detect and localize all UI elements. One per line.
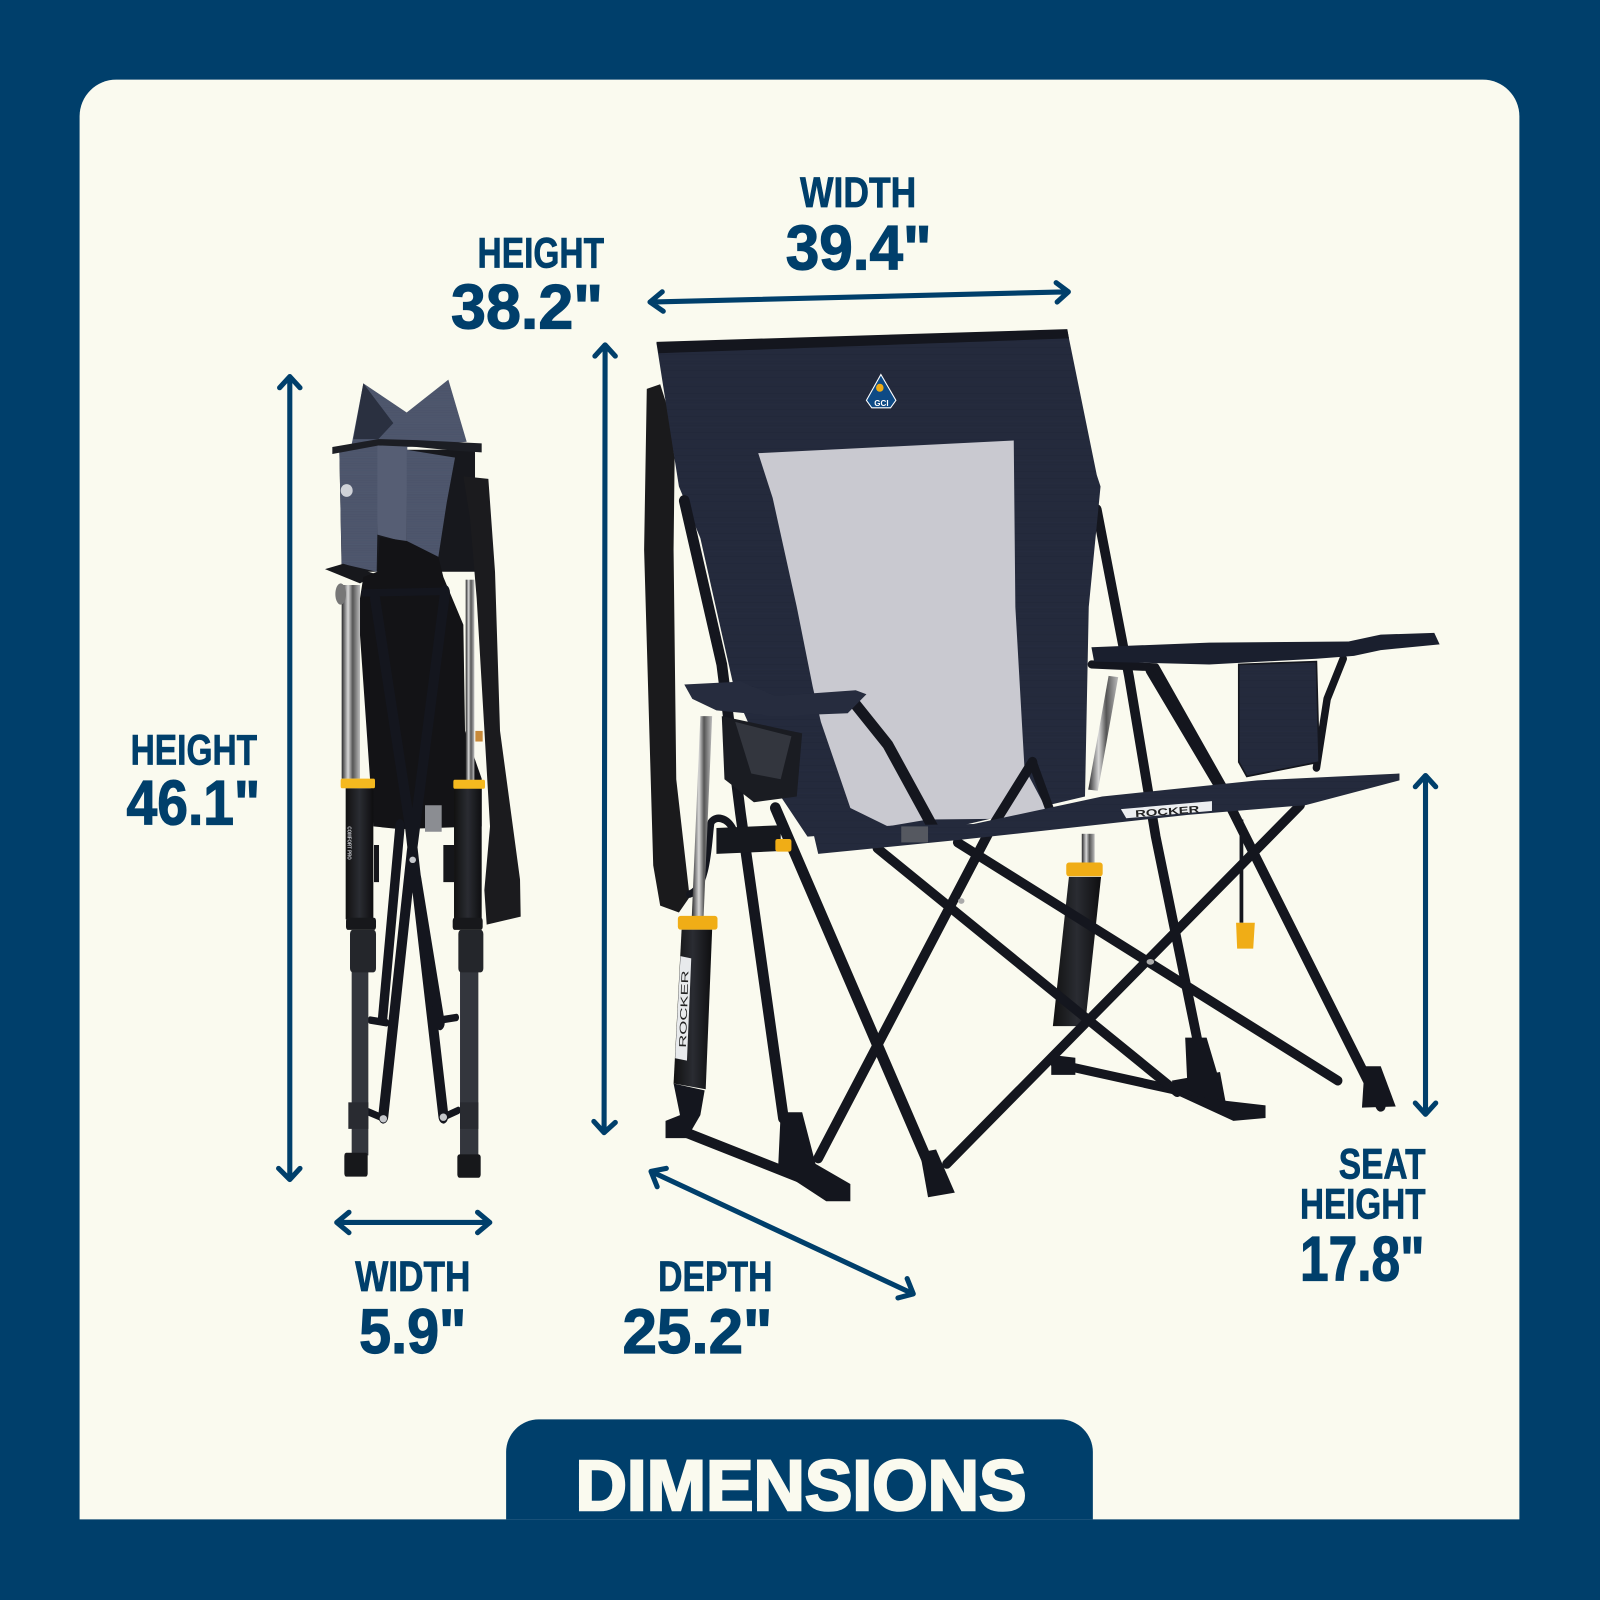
GCI logo: GCI — [874, 398, 889, 408]
lanyard and tab — [1238, 819, 1245, 923]
label: depth: DEPTH — [658, 1253, 772, 1300]
folded chair photo: COMFORT PRO — [345, 826, 352, 860]
rear frame — [1088, 676, 1118, 791]
label: folded width: 5.9" — [359, 1297, 466, 1367]
label: chair width: 39.4" — [786, 213, 932, 283]
arrow: chair height — [594, 345, 615, 1133]
label: seat height: SEAT — [1339, 1141, 1426, 1188]
mesh panel — [758, 441, 1051, 826]
label: folded height — [127, 726, 260, 838]
seat label — [1121, 801, 1212, 819]
label: depth — [622, 1253, 772, 1367]
arrow: folded height — [279, 377, 300, 1180]
label: folded width — [355, 1253, 470, 1367]
label: seat height — [1300, 1141, 1426, 1295]
pivot hardware — [716, 825, 781, 854]
title tab: dimensions — [506, 1419, 1093, 1526]
arrow: top width — [650, 283, 1068, 311]
title tab: dimensions: DIMENSIONS — [576, 1446, 1027, 1526]
label: folded height: HEIGHT — [131, 726, 257, 773]
left arm — [684, 682, 866, 716]
main chair photo — [644, 329, 1440, 1201]
seat — [813, 774, 1399, 854]
seat label: ROCKER — [1135, 803, 1200, 819]
arrow: seat height — [1415, 776, 1436, 1114]
arrow: depth — [651, 1168, 913, 1298]
main chair photo: ROCKER — [677, 970, 691, 1048]
folded chair photo — [325, 380, 521, 1178]
label: chair height: 38.2" — [451, 273, 603, 343]
label: chair width — [786, 169, 932, 283]
label: depth: 25.2" — [622, 1297, 772, 1367]
front rocker rail — [671, 1127, 845, 1195]
GCI logo — [866, 375, 896, 408]
label: chair height: HEIGHT — [478, 229, 604, 276]
feet — [920, 1150, 955, 1197]
label: seat height: 17.8" — [1300, 1225, 1424, 1295]
carry strap — [644, 384, 690, 912]
label: folded width: WIDTH — [355, 1253, 470, 1300]
label: folded height: 46.1" — [127, 768, 260, 838]
label: seat height: HEIGHT — [1300, 1180, 1426, 1227]
right pocket — [1239, 662, 1319, 776]
right arm — [1091, 633, 1440, 664]
left rocker cylinder — [674, 930, 712, 1089]
cup holder — [722, 716, 802, 802]
label: chair width: WIDTH — [800, 169, 916, 216]
arrow: folded width — [337, 1212, 490, 1233]
front frame — [684, 501, 936, 1181]
label: chair height — [451, 229, 604, 343]
back fabric — [656, 330, 1101, 837]
